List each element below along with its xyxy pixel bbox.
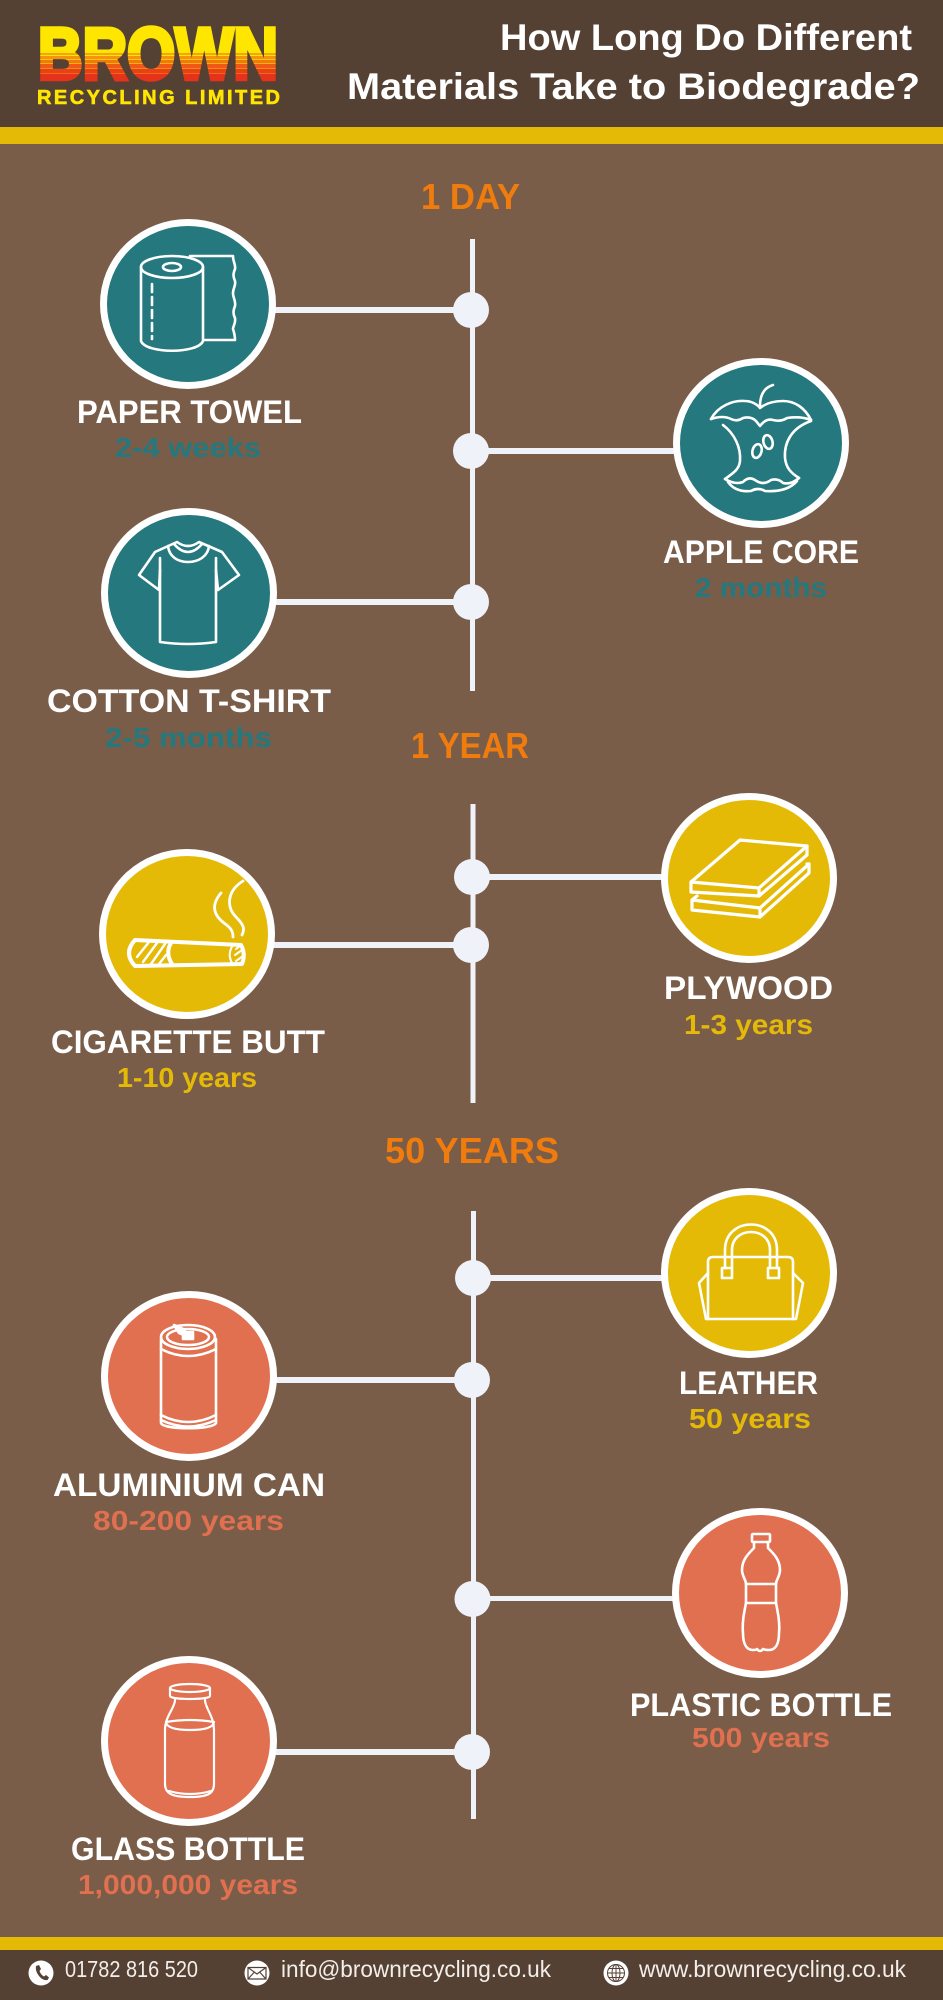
- label: glass bottle: GLASS BOTTLE: [71, 1831, 305, 1867]
- connector: paper towel: [274, 292, 489, 328]
- icon: aluminium can: [104, 1294, 274, 1458]
- phone number: 01782 816 520: [65, 1956, 198, 1982]
- icon: phone: [28, 1960, 54, 1986]
- footer panel: [0, 1937, 943, 2000]
- duration: plastic bottle: 500 years: [692, 1722, 830, 1753]
- connector: leather: [455, 1260, 663, 1296]
- item: glass bottle: [71, 1660, 490, 1900]
- website address: www.brownrecycling.co.uk: [638, 1956, 906, 1982]
- connector: cotton t-shirt: [275, 584, 489, 620]
- heading: 1 year: 1 YEAR: [411, 725, 529, 766]
- icon: globe: [604, 1960, 628, 1986]
- header panel: [0, 0, 943, 144]
- timeline: 1 year spine: [470, 804, 476, 1103]
- icon: glass bottle: [104, 1660, 274, 1822]
- icon: email: [244, 1960, 270, 1986]
- logo: BROWN: [38, 14, 278, 95]
- duration: plywood: 1-3 years: [684, 1009, 813, 1040]
- item: apple core: [453, 362, 859, 603]
- email address: info@brownrecycling.co.uk: [281, 1956, 551, 1982]
- item: leather: [455, 1192, 834, 1434]
- icon: t-shirt: [104, 512, 274, 674]
- logo: RECYCLING LIMITED: [37, 87, 280, 109]
- connector: plastic bottle: [454, 1581, 675, 1617]
- connector: aluminium can: [275, 1362, 490, 1398]
- item: cigarette butt: [51, 852, 489, 1093]
- icon: cigarette: [102, 852, 272, 1016]
- title: How Long Do Different: [500, 17, 912, 58]
- timeline: 1 day spine: [470, 239, 475, 691]
- label: cigarette butt: CIGARETTE BUTT: [51, 1024, 325, 1060]
- label: cotton t-shirt: COTTON T-SHIRT: [47, 683, 331, 719]
- connector: glass bottle: [275, 1734, 490, 1770]
- timeline: 50 years spine: [471, 1211, 476, 1819]
- duration: aluminium can: 80-200 years: [93, 1505, 284, 1536]
- item: cotton t-shirt: [47, 512, 489, 753]
- connector: plywood: [454, 859, 663, 895]
- connector: cigarette butt: [273, 927, 489, 963]
- duration: apple core: 2 months: [695, 572, 827, 603]
- icon: plastic bottle: [676, 1512, 844, 1674]
- icon: plywood: [664, 796, 834, 960]
- label: aluminium can: ALUMINIUM CAN: [53, 1467, 325, 1503]
- title: Materials Take to Biodegrade?: [347, 66, 920, 107]
- icon: paper towel: [104, 222, 272, 386]
- duration: paper towel: 2-4 weeks: [115, 432, 261, 463]
- label: leather: LEATHER: [679, 1365, 818, 1401]
- item: plywood: [454, 796, 834, 1040]
- title: [347, 17, 920, 107]
- heading: 50 years: 50 YEARS: [385, 1130, 559, 1171]
- duration: glass bottle: 1,000,000 years: [78, 1869, 298, 1900]
- item: paper towel: [77, 222, 489, 463]
- duration: cotton t-shirt: 2-5 months: [105, 722, 272, 753]
- label: paper towel: PAPER TOWEL: [77, 394, 302, 430]
- icon: handbag: [664, 1192, 834, 1354]
- heading: 1 day: 1 DAY: [421, 176, 520, 217]
- label: plastic bottle: PLASTIC BOTTLE: [630, 1687, 892, 1723]
- item: aluminium can: [53, 1294, 490, 1536]
- label: plywood: PLYWOOD: [664, 970, 833, 1006]
- connector: apple core: [453, 433, 675, 469]
- duration: cigarette butt: 1-10 years: [117, 1062, 257, 1093]
- label: apple core: APPLE CORE: [663, 534, 859, 570]
- icon: apple core: [676, 362, 846, 524]
- duration: leather: 50 years: [689, 1403, 811, 1434]
- item: plastic bottle: [454, 1512, 892, 1753]
